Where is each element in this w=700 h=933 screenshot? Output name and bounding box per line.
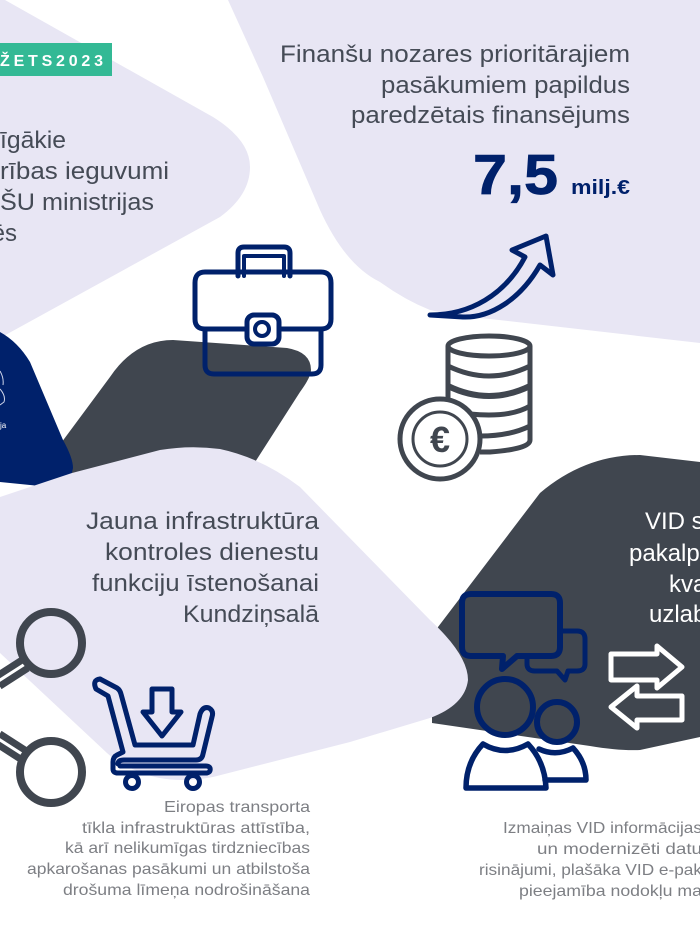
panel: lower lavender shape [0, 447, 468, 780]
badge: hashtag [0, 43, 112, 76]
text block: top-left heading: rības ieguvumi [0, 158, 169, 185]
text block: top-left heading [0, 127, 169, 247]
icon: network links [0, 612, 82, 803]
icon: chat bubbles and people [462, 594, 586, 788]
text block: VID description [479, 820, 700, 900]
text block: infrastructure heading: Jauna infrastruktūra [86, 508, 320, 535]
icon: briefcase [195, 247, 331, 374]
icon: exchange arrows [611, 646, 682, 728]
text block: VID description: un modernizēti datu [537, 841, 700, 858]
icon: euro coin: € [430, 419, 450, 460]
badge text: ŽETS2023 [0, 51, 103, 70]
text block: financing heading: pasākumiem papildus [381, 72, 630, 99]
text block: VID description: pieejamība nodokļu ma [519, 883, 700, 900]
text block: infrastructure heading: kontroles dienestu [105, 539, 319, 566]
text block: infrastructure heading: Kundziņsalā [183, 601, 320, 628]
text block: transport description: kā arī nelikumīgas tirdzniecības [65, 840, 310, 857]
text block: top-left heading: īgākie [0, 127, 66, 154]
text block: VID description: risinājumi, plašāka VID e-pak [479, 862, 700, 879]
text block: top-left heading: ŠU ministrijas [0, 188, 154, 216]
text block: infrastructure heading [86, 508, 320, 628]
text block: transport description: tīkla infrastruktūras attīstība, [82, 820, 310, 837]
text block: transport description: drošuma līmeņa nodrošināšana [63, 882, 310, 899]
panel: lower-right dark shape [432, 455, 700, 750]
icon: partial emblem [0, 371, 4, 405]
icon: shopping cart [95, 679, 213, 788]
stat: 7,5 million euro: milj.€ [571, 177, 630, 199]
text block: financing heading [280, 41, 630, 129]
logo text fragment: ja [0, 421, 7, 430]
text block: infrastructure heading: funkciju īstenošanai [92, 570, 319, 597]
panel: top-left lavender shape [0, 0, 250, 338]
icon: coin stack [400, 336, 530, 479]
icon: rising arrow [430, 236, 553, 317]
text block: transport description: apkarošanas pasākumi un atbilstoša [27, 861, 310, 878]
stat: 7,5 million euro [473, 143, 630, 207]
text block: transport description: Eiropas transporta [164, 799, 310, 816]
text block: VID heading [629, 508, 700, 628]
text block: transport description [27, 799, 310, 899]
text block: financing heading: Finanšu nozares prioritārajiem [280, 41, 630, 68]
text block: VID description: Izmaiņas VID informācijas [503, 820, 700, 837]
icon: euro coin [400, 399, 480, 479]
panel: dark shape behind briefcase [50, 340, 311, 490]
stat: 7,5 million euro: 7,5 [473, 143, 558, 207]
text block: VID heading: pakalp [629, 540, 700, 567]
text block: financing heading: paredzētais finansējums [351, 102, 630, 129]
panel: top-right lavender shape [228, 0, 700, 343]
panel: navy logo shape [0, 332, 73, 487]
